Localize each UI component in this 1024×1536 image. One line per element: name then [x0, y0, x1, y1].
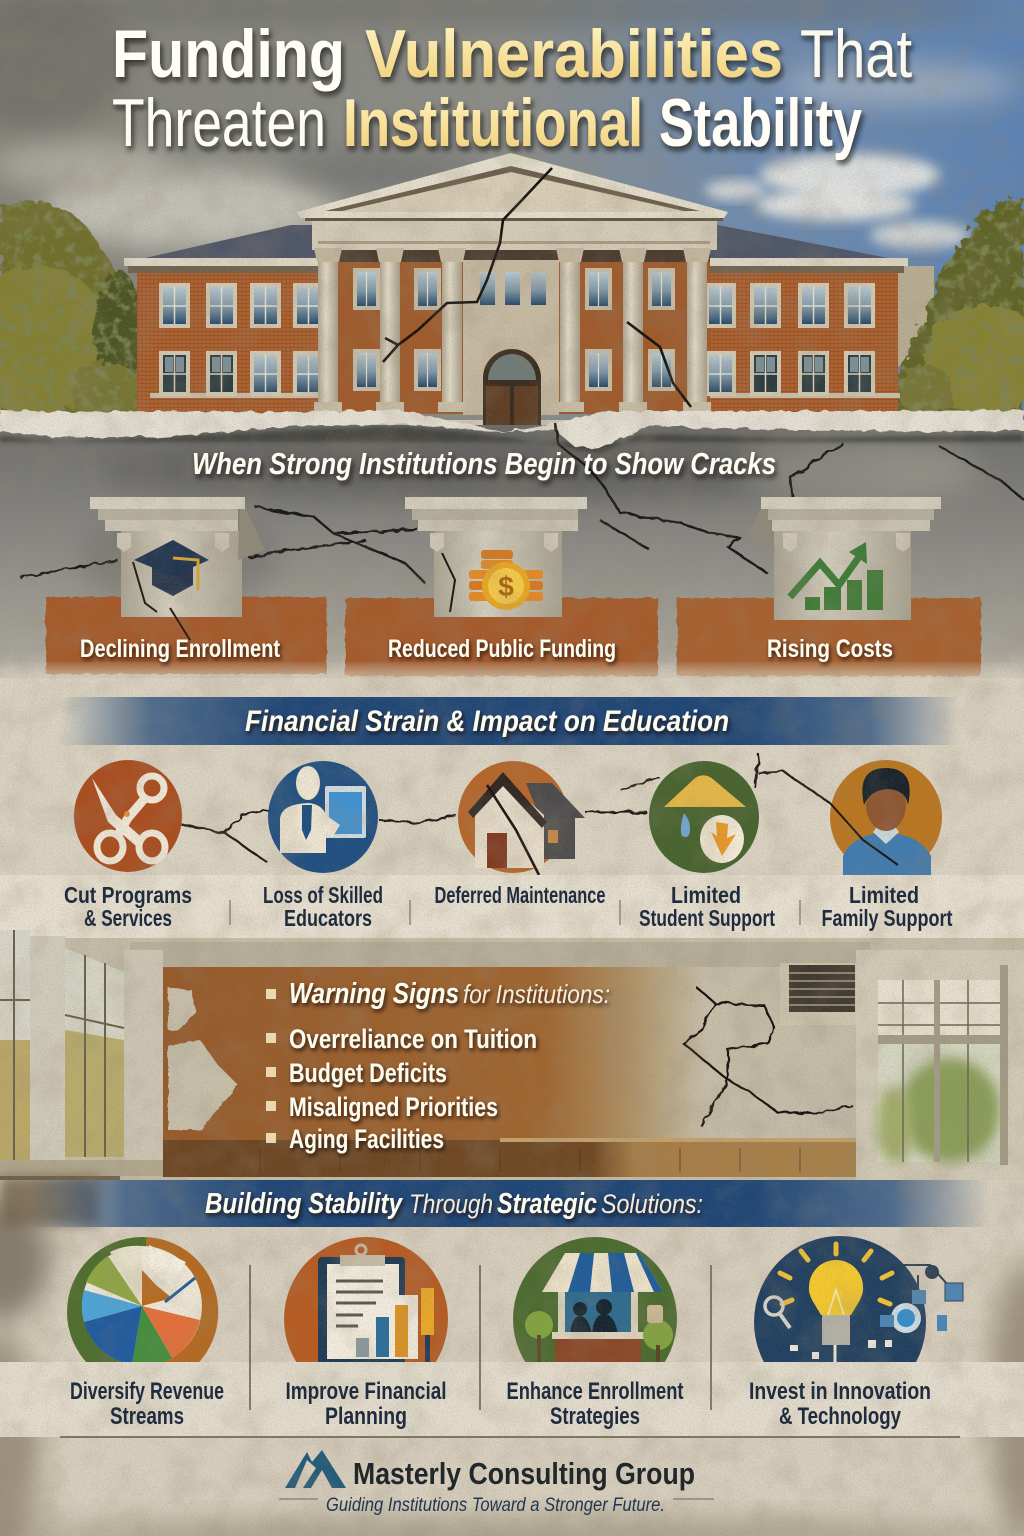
impact labels	[64, 882, 953, 931]
logo text: Masterly Consulting Group	[353, 1456, 695, 1491]
dividers and logo mark	[230, 900, 800, 1499]
impact labels: Family Support	[822, 905, 953, 931]
title: Institutional	[343, 85, 643, 161]
impact labels: & Services	[84, 905, 172, 931]
impact labels: Deferred Maintenance	[434, 882, 606, 908]
impact labels: Loss of Skilled	[263, 882, 383, 908]
solutions labels: Improve Financial	[286, 1378, 446, 1405]
solutions labels: Invest in Innovation	[749, 1378, 931, 1405]
solutions labels: Strategies	[550, 1403, 640, 1430]
logo text: Guiding Institutions Toward a Stronger Future.	[326, 1495, 665, 1516]
bar labels	[80, 635, 893, 663]
left windows	[0, 930, 168, 1236]
pillar: reduced public funding	[405, 497, 587, 617]
building crack	[383, 168, 691, 407]
peeling plaster	[168, 988, 238, 1130]
warning signs list	[266, 978, 610, 1154]
ground crack strip	[0, 410, 1024, 454]
icon: graduation cap	[134, 540, 209, 596]
building	[124, 153, 908, 430]
icon: rising chart	[790, 542, 883, 610]
impact labels: Limited	[671, 882, 741, 908]
logo text	[326, 1456, 695, 1516]
heading: financial strain: Financial Strain & Impact on Education	[245, 705, 729, 738]
icon: coins: $	[498, 571, 514, 602]
heading: when strong institutions: When Strong Institutions Begin to Show Cracks	[192, 446, 776, 481]
title: Vulnerabilities	[365, 16, 783, 92]
wall cracks	[683, 987, 852, 1127]
heading: building stability: Solutions:	[601, 1189, 703, 1219]
cracked wall	[163, 967, 856, 1177]
pediment	[297, 153, 728, 250]
icon: mountain mark	[285, 1450, 346, 1488]
impact labels: Student Support	[639, 905, 775, 931]
solutions labels: Streams	[110, 1403, 184, 1430]
pillar: declining enrollment	[90, 497, 265, 640]
icon: coins	[469, 550, 543, 610]
solutions labels: Planning	[325, 1403, 407, 1430]
solutions labels	[70, 1378, 931, 1430]
icon: storefront	[513, 1237, 677, 1401]
icon: educator	[268, 761, 378, 873]
roof	[145, 225, 888, 258]
warning signs list: Misaligned Priorities	[289, 1092, 498, 1122]
trees: right	[892, 198, 1024, 415]
impact labels: Limited	[849, 882, 919, 908]
pillar: rising costs	[748, 497, 941, 620]
strip: solutions labels	[0, 1362, 1024, 1438]
icon: financial plan	[284, 1237, 448, 1401]
title: Funding	[112, 16, 345, 92]
vent	[780, 963, 856, 1025]
impact labels: Cut Programs	[64, 882, 192, 908]
icon: scissors	[74, 760, 182, 872]
warning signs list: Budget Deficits	[289, 1058, 447, 1088]
impact cracks	[180, 753, 830, 863]
warning signs list: Aging Facilities	[289, 1124, 444, 1154]
bar labels: Rising Costs	[767, 635, 893, 663]
icon: child	[830, 760, 942, 875]
heading: building stability	[205, 1188, 703, 1220]
solutions labels: Enhance Enrollment	[506, 1378, 684, 1405]
strip: impact labels	[0, 875, 1024, 940]
title	[112, 16, 912, 161]
heading: building stability: Through	[409, 1189, 493, 1219]
background: impact section	[0, 668, 1024, 943]
warning signs list: for Institutions:	[463, 979, 610, 1009]
solutions labels: & Technology	[779, 1403, 902, 1430]
central entrance	[463, 260, 559, 430]
background: sky	[0, 0, 1024, 420]
brick wings	[124, 258, 908, 414]
icon: support umbrella	[649, 761, 759, 873]
solutions labels: Diversify Revenue	[70, 1378, 224, 1405]
bar labels: Declining Enrollment	[80, 635, 281, 663]
wainscot	[163, 1138, 856, 1177]
section cracks	[20, 423, 1024, 583]
heading: building stability: Building Stability	[205, 1188, 404, 1220]
centre wall	[320, 248, 710, 414]
warning signs list: Overreliance on Tuition	[289, 1024, 537, 1054]
warning signs list: Warning Signs	[289, 978, 459, 1010]
heading: building stability: Strategic	[497, 1188, 597, 1220]
right window	[856, 950, 1024, 1180]
trees: left	[0, 200, 145, 418]
room floor band	[0, 1176, 100, 1226]
impact labels: Educators	[284, 905, 372, 931]
icon: revenue pie	[67, 1237, 218, 1387]
icon: house	[458, 761, 585, 875]
title: Threaten	[112, 85, 326, 161]
windows	[159, 268, 875, 396]
banner: building stability	[30, 1180, 990, 1227]
background: concrete crack section	[0, 425, 1024, 690]
brown bars	[46, 597, 981, 676]
title: Stability	[659, 85, 862, 161]
icon: innovation bulb	[754, 1236, 963, 1408]
columns	[314, 248, 711, 412]
title: That	[800, 16, 912, 92]
background: solutions section	[0, 1180, 1024, 1536]
banner: financial strain	[60, 697, 960, 745]
panel: room	[0, 930, 1024, 1236]
bar labels: Reduced Public Funding	[388, 635, 616, 663]
